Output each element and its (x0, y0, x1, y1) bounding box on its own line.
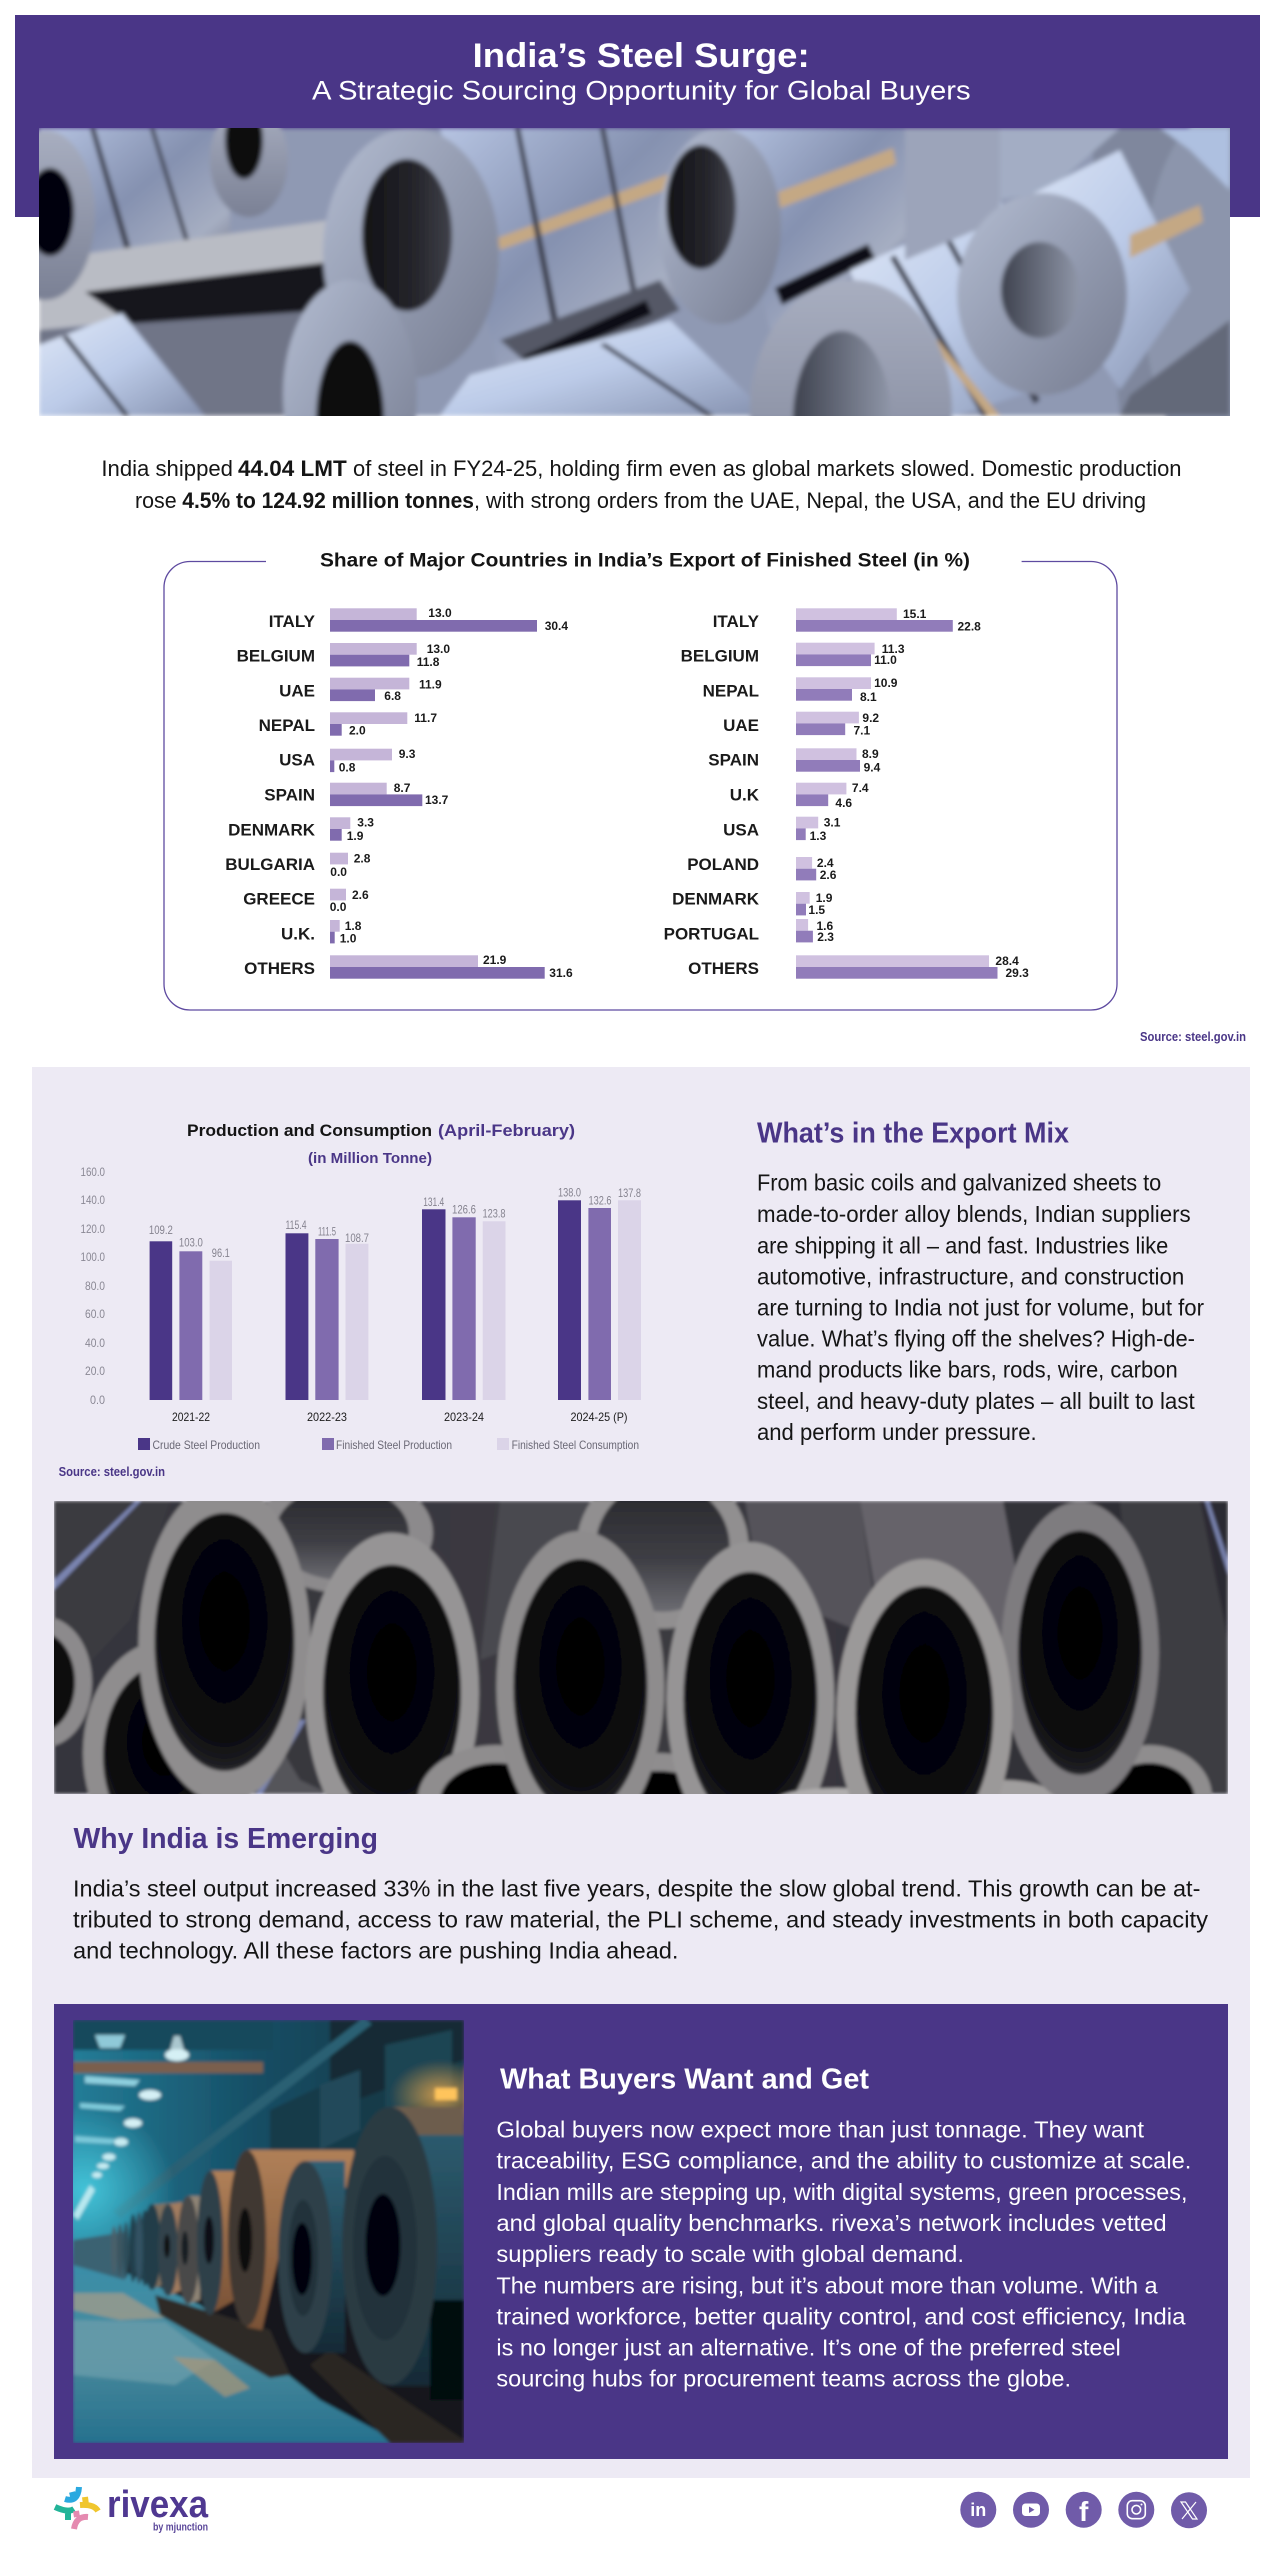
panel: export share frame (164, 562, 1117, 1010)
heading: what's in the export mix: What’s in the Export Mix (757, 1118, 1069, 1150)
bar chart: right export share: SPAIN (708, 751, 759, 770)
text block: export mix: steel, and heavy-duty plates – all built to last (757, 1388, 1195, 1414)
bar chart: left export share: 1.8 (345, 919, 362, 933)
text block: what buyers want: traceability, ESG compliance, and the ability to customize at scale. (496, 2148, 1191, 2174)
bar chart: right export share: 11.3 (882, 642, 905, 656)
source note: production chart: Source: steel.gov.in (59, 1465, 165, 1479)
bar chart: production and consumption: 111.5 (318, 1224, 336, 1238)
bar chart: right export share: 29.3 (1006, 966, 1029, 980)
chart axis: y values: 140.0 (80, 1193, 105, 1207)
bar chart: right export share: UAE (723, 716, 759, 735)
bar chart: left export share: 11.9 (419, 678, 442, 692)
text block: what buyers want: sourcing hubs for procurement teams across the globe. (496, 2366, 1071, 2392)
bar chart: left export share: 3.3 (357, 816, 374, 830)
bar chart: right export share: ITALY (713, 612, 760, 631)
chart axis: y values: 60.0 (85, 1307, 105, 1321)
text block: what buyers want: The numbers are rising, but it’s about more than volume. With a (496, 2272, 1158, 2298)
chart axis: y values: 0.0 (90, 1393, 105, 1407)
icon: linkedin (960, 2492, 996, 2528)
bar chart: production and consumption: 2022-23 (307, 1410, 347, 1424)
bar chart: right export share: 2.6 (820, 868, 837, 882)
bar chart: left export share: 21.9 (483, 953, 507, 967)
text block: export mix: value. What’s flying off the shelves? High-de- (757, 1325, 1195, 1351)
text block: why india: India’s steel output increased 33% in the last five years, despite the slow global trend. This growth can be at- (73, 1876, 1200, 1902)
intro text (101, 456, 1181, 513)
text block: why india: and technology. All these factors are pushing India ahead. (73, 1937, 678, 1963)
bar chart: right export share: U.K (730, 786, 760, 805)
text block: export mix: and perform under pressure. (757, 1419, 1037, 1445)
bar chart: production and consumption: 103.0 (179, 1235, 203, 1249)
text block: export mix (757, 1170, 1204, 1445)
logo: rivexa: by mjunction (153, 2522, 208, 2534)
bar chart: production and consumption: 2021-22 (172, 1410, 210, 1424)
bar chart: production and consumption: 109.2 (149, 1223, 173, 1237)
bar chart: left export share: UAE (279, 681, 315, 700)
title: India’s Steel Surge: (473, 37, 810, 75)
chart title: export share: Share of Major Countries in India’s Export of Finished Steel (in %) (320, 550, 970, 572)
bar chart: right export share: 11.0 (874, 653, 897, 667)
icon: linkedin: in (970, 2500, 986, 2520)
bar chart: production and consumption (149, 1185, 641, 1424)
bar chart: left export share: 0.0 (330, 900, 347, 914)
icon: x (1171, 2492, 1207, 2528)
bar chart: left export share: 11.7 (414, 711, 437, 725)
intro text: rose (135, 488, 177, 513)
bar chart: right export share: 15.1 (903, 607, 927, 621)
bar chart: right export share (664, 607, 1029, 980)
intro text: of steel in FY24-25, holding firm even as global markets slowed. Domestic production (353, 456, 1182, 481)
logo: rivexa: rivexa (107, 2484, 209, 2526)
bar chart: right export share: POLAND (687, 855, 759, 874)
header banner (15, 15, 1260, 217)
bar chart: left export share: 13.7 (425, 793, 449, 807)
bar chart: left export share: 0.8 (339, 760, 356, 774)
bar chart: right export share: 2.4 (817, 856, 834, 870)
source note: export share: Source: steel.gov.in (1140, 1030, 1246, 1044)
bar chart: production and consumption: 126.6 (452, 1203, 476, 1217)
bar chart: left export share: 13.0 (427, 642, 450, 656)
bar chart: right export share: 1.5 (808, 903, 825, 917)
bar chart: production and consumption: 132.6 (588, 1194, 612, 1208)
legend: production chart: Crude Steel Production (152, 1438, 260, 1452)
text block: why india: tributed to strong demand, access to raw material, the PLI scheme, and steady investments in both capacity (73, 1907, 1209, 1933)
text block: what buyers want: suppliers ready to scale with global demand. (496, 2241, 964, 2267)
text block: export mix: From basic coils and galvanized sheets to (757, 1170, 1161, 1196)
legend: production chart: Finished Steel Consumption (512, 1438, 639, 1452)
bar chart: right export share: 10.9 (874, 676, 898, 690)
chart axis: y values: 160.0 (80, 1165, 105, 1179)
chart axis: y values: 100.0 (80, 1250, 105, 1264)
bar chart: right export share: 3.1 (824, 816, 841, 830)
text block: export mix: are turning to India not just for volume, but for (757, 1295, 1204, 1321)
bar chart: left export share: USA (279, 751, 315, 770)
chart axis: y values: 20.0 (85, 1364, 105, 1378)
bar chart: left export share: 2.6 (352, 888, 369, 902)
bar chart: production and consumption: 131.4 (423, 1195, 444, 1209)
photo: steel pipes (54, 1501, 1228, 1794)
bar chart: left export share: U.K. (281, 924, 315, 943)
intro text: India shipped (101, 456, 233, 481)
bar chart: production and consumption: 96.1 (212, 1246, 230, 1260)
text block: what buyers want: Indian mills are stepping up, with digital systems, green processes, (496, 2179, 1187, 2205)
bar chart: left export share: DENMARK (228, 820, 316, 839)
chart heading: production and consumption: Production and Consumption (187, 1121, 432, 1140)
bar chart: left export share: 8.7 (394, 781, 411, 795)
bar chart: left export share: 0.0 (330, 865, 347, 879)
text block: export mix: are shipping it all – and fast. Industries like (757, 1232, 1168, 1258)
bar chart: left export share: NEPAL (259, 716, 315, 735)
bar chart: left export share: BELGIUM (237, 647, 315, 666)
panel: lavender background (32, 1067, 1250, 2478)
photo: steel coils (39, 128, 1230, 416)
icon: facebook (1066, 2492, 1102, 2528)
bar chart: right export share: 8.9 (862, 747, 879, 761)
chart axis: y values: 120.0 (80, 1222, 105, 1236)
bar chart: left export share: 2.0 (349, 724, 366, 738)
bar chart: right export share: 4.6 (835, 796, 852, 810)
bar chart: right export share: BELGIUM (681, 647, 759, 666)
bar chart: right export share: 7.1 (854, 724, 871, 738)
text block: what buyers want (496, 2116, 1191, 2392)
bar chart: right export share: 22.8 (958, 620, 981, 634)
icon: instagram (1118, 2492, 1154, 2528)
bar chart: left export share: 11.8 (417, 655, 440, 669)
bar chart: right export share: USA (723, 820, 759, 839)
bar chart: left export share: 2.8 (354, 852, 371, 866)
bar chart: left export share: 30.4 (545, 619, 568, 633)
bar chart: left export share: 1.9 (347, 829, 364, 843)
text block: export mix: automotive, infrastructure, and construction (757, 1263, 1184, 1289)
icon: youtube (1013, 2492, 1049, 2528)
intro text: 4.5% to 124.92 million tonnes (182, 488, 474, 513)
bar chart: right export share: DENMARK (672, 890, 760, 909)
bar chart: left export share: 31.6 (549, 966, 573, 980)
bar chart: left export share: BULGARIA (225, 855, 315, 874)
logo: rivexa (55, 2484, 209, 2534)
text block: export mix: mand products like bars, rods, wire, carbon (757, 1356, 1178, 1382)
chart axis: y values: 40.0 (85, 1336, 105, 1350)
chart axis: y values (80, 1165, 105, 1407)
bar chart: left export share: 9.3 (399, 747, 416, 761)
bar chart: production and consumption: 138.0 (558, 1185, 581, 1199)
bar chart: right export share: 1.6 (816, 919, 834, 933)
bar chart: left export share (225, 606, 573, 980)
bar chart: right export share: OTHERS (688, 959, 759, 978)
bar chart: right export share: 28.4 (995, 954, 1019, 968)
chart axis: y values: 80.0 (85, 1279, 105, 1293)
intro text: , with strong orders from the UAE, Nepal, the USA, and the EU driving (474, 488, 1146, 513)
heading: what buyers want and get: What Buyers Want and Get (500, 2064, 869, 2096)
bar chart: production and consumption: 123.8 (482, 1207, 506, 1221)
bar chart: right export share: 7.4 (852, 781, 869, 795)
bar chart: right export share: NEPAL (703, 681, 759, 700)
panel: what buyers want (54, 2004, 1228, 2459)
legend: production chart: Finished Steel Production (336, 1438, 452, 1452)
bar chart: left export share: 1.0 (340, 932, 357, 946)
bar chart: right export share: 2.3 (817, 930, 834, 944)
bar chart: left export share: GREECE (243, 890, 315, 909)
bar chart: production and consumption: 2024-25 (P) (570, 1410, 628, 1424)
photo: coil warehouse (73, 2020, 464, 2443)
text block: why india (73, 1876, 1209, 1963)
text block: what buyers want: and global quality benchmarks. rivexa’s network includes vetted (496, 2210, 1167, 2236)
bar chart: production and consumption: 115.4 (286, 1218, 307, 1232)
legend: production chart (138, 1438, 639, 1452)
bar chart: left export share: ITALY (269, 612, 316, 631)
bar chart: left export share: 13.0 (428, 606, 452, 620)
text block: export mix: made-to-order alloy blends, Indian suppliers (757, 1201, 1191, 1227)
intro text: 44.04 LMT (238, 456, 347, 481)
chart heading: production and consumption: (April-February) (438, 1121, 575, 1140)
bar chart: production and consumption: 2023-24 (444, 1410, 484, 1424)
bar chart: right export share: PORTUGAL (664, 924, 759, 943)
chart heading: production and consumption (187, 1121, 575, 1167)
bar chart: right export share: 9.4 (864, 760, 881, 774)
bar chart: right export share: 8.1 (860, 690, 877, 704)
bar chart: right export share: 1.9 (816, 891, 833, 905)
bar chart: right export share: 9.2 (862, 711, 879, 725)
bar chart: left export share: SPAIN (264, 786, 315, 805)
bar chart: left export share: OTHERS (244, 959, 315, 978)
bar chart: production and consumption: 108.7 (345, 1231, 369, 1245)
bar chart: left export share: 6.8 (384, 689, 401, 703)
chart heading: production and consumption: (in Million Tonne) (308, 1151, 432, 1167)
subtitle: A Strategic Sourcing Opportunity for Global Buyers (312, 76, 971, 106)
heading: why india is emerging: Why India is Emerging (74, 1823, 378, 1855)
bar chart: production and consumption: 137.8 (618, 1186, 641, 1200)
icon: facebook: f (1079, 2496, 1089, 2527)
text block: what buyers want: is no longer just an alternative. It’s one of the preferred steel (496, 2334, 1121, 2360)
text block: what buyers want: trained workforce, better quality control, and cost efficiency, India (496, 2303, 1186, 2329)
bar chart: right export share: 1.3 (810, 829, 827, 843)
text block: what buyers want: Global buyers now expect more than just tonnage. They want (496, 2116, 1145, 2142)
